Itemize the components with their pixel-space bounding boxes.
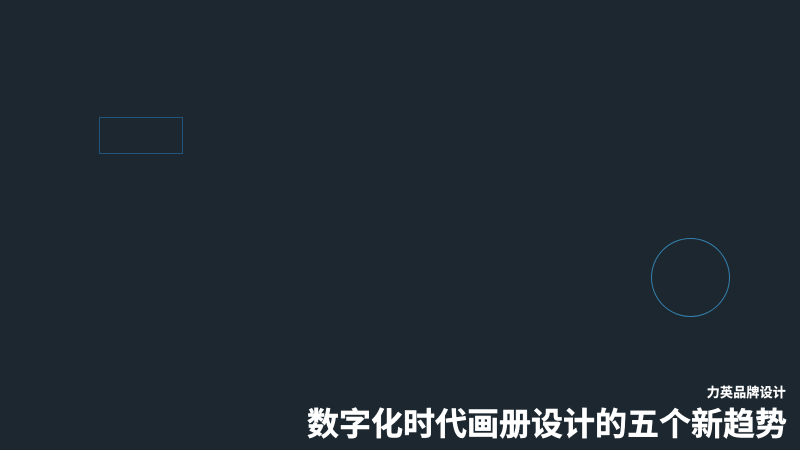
subtitle: brand name: 力英品牌设计: [707, 385, 786, 400]
title: 数字化时代画册设计的五个新趋势: [307, 406, 787, 442]
rectangle outline: [99, 117, 183, 154]
circle outline: [651, 238, 730, 317]
